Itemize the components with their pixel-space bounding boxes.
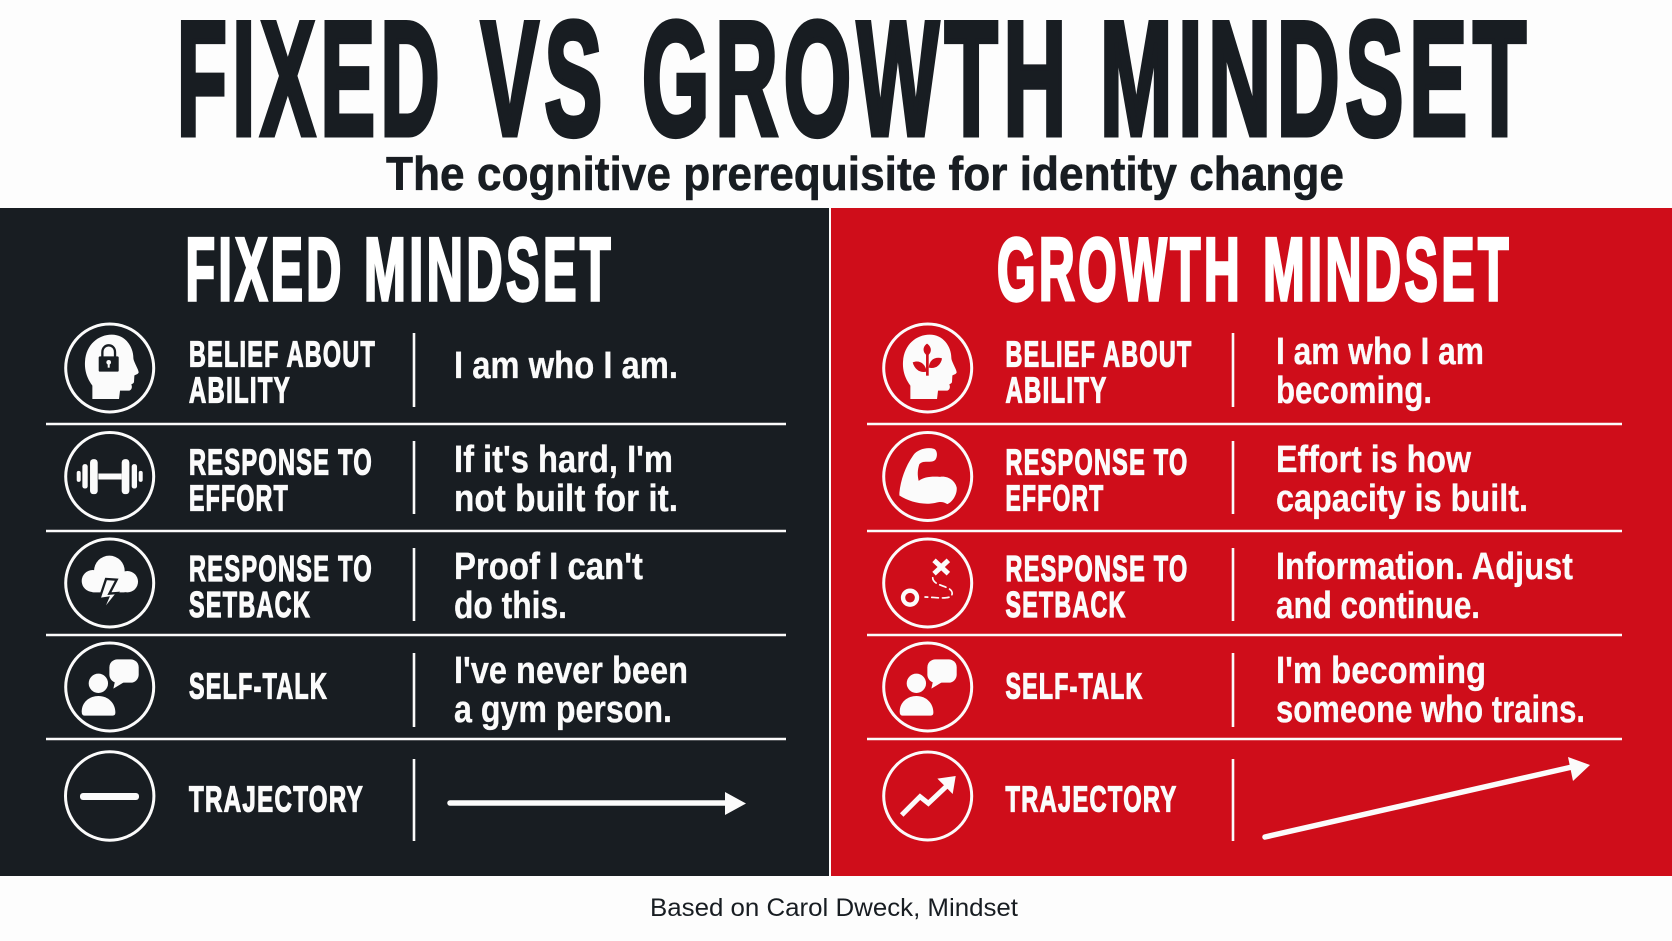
subtitle: The cognitive prerequisite for identity change (386, 147, 1344, 200)
statement: do this. (454, 585, 567, 627)
label: TRAJECTORY (189, 778, 364, 820)
label: EFFORT (189, 478, 289, 518)
icon: person with speech bubble (884, 643, 972, 731)
label: RESPONSE TO (1006, 442, 1188, 482)
icon: dumbbell (66, 433, 154, 520)
icon: rising arrow (884, 752, 972, 840)
label: RESPONSE TO (189, 442, 373, 482)
label (189, 442, 373, 518)
icon: head with plant (884, 324, 972, 412)
statement (1276, 650, 1585, 731)
label: RESPONSE TO (1006, 548, 1188, 589)
icon: flat line (66, 752, 154, 840)
statement: I am who I am (1276, 331, 1484, 373)
statement: Information. Adjust (1276, 546, 1573, 588)
row: response to setback (growth) (884, 539, 1573, 627)
label: RESPONSE TO (189, 548, 373, 589)
statement (454, 650, 688, 731)
footer source note: Based on Carol Dweck, Mindset (650, 894, 1018, 922)
row: self-talk (fixed) (66, 643, 688, 731)
label (189, 548, 373, 625)
label: EFFORT (1006, 478, 1104, 518)
statement (454, 546, 643, 627)
heading: growth mindset: GROWTH (997, 219, 1243, 319)
arrow: rising trajectory (1265, 757, 1590, 837)
label: BELIEF ABOUT (1006, 334, 1192, 374)
statement: I'm becoming (1276, 650, 1486, 692)
icon: flexed bicep (884, 433, 972, 520)
statement: Effort is how (1276, 439, 1471, 481)
label (1006, 548, 1188, 625)
statement: someone who trains. (1276, 689, 1585, 731)
label: TRAJECTORY (1006, 778, 1178, 820)
statement: not built for it. (454, 478, 678, 520)
panel: growth mindset (831, 208, 1672, 876)
row: response to effort (fixed) (66, 433, 678, 520)
label: ABILITY (189, 370, 291, 410)
label (1006, 442, 1188, 518)
row: belief about ability (growth) (884, 324, 1484, 412)
statement (1276, 439, 1528, 520)
row: belief about ability (fixed) (66, 324, 678, 412)
statement: a gym person. (454, 689, 672, 731)
heading: fixed mindset: FIXED (186, 219, 344, 319)
row: trajectory (growth) (884, 752, 1590, 840)
label: SELF-TALK (189, 666, 328, 706)
row: trajectory (fixed) (66, 752, 746, 840)
icon: route with X (884, 539, 972, 627)
label: ABILITY (1006, 370, 1108, 410)
row: response to setback (fixed) (66, 539, 643, 627)
icon: storm cloud with lightning (66, 539, 154, 627)
icon: head with padlock (66, 324, 154, 412)
statement (454, 439, 678, 520)
label: SETBACK (1006, 584, 1126, 625)
statement: I am who I am. (454, 345, 678, 387)
label: BELIEF ABOUT (189, 334, 376, 374)
icon: person with speech bubble (66, 643, 154, 731)
label: SETBACK (189, 584, 311, 625)
label: SELF-TALK (1006, 666, 1144, 706)
arrow: flat trajectory (450, 792, 746, 815)
heading: fixed mindset: MINDSET (364, 219, 614, 319)
statement: Proof I can't (454, 546, 643, 588)
statement: and continue. (1276, 585, 1480, 627)
statement: I've never been (454, 650, 688, 692)
panel: fixed mindset (0, 208, 829, 876)
heading: fixed mindset (186, 219, 614, 319)
statement: If it's hard, I'm (454, 439, 673, 481)
statement: capacity is built. (1276, 478, 1528, 520)
row: response to effort (growth) (884, 433, 1528, 520)
statement (1276, 331, 1484, 412)
title (177, 0, 1532, 170)
label (189, 334, 376, 410)
statement: becoming. (1276, 370, 1432, 412)
statement (1276, 546, 1573, 627)
row: self-talk (growth) (884, 643, 1585, 731)
label (1006, 334, 1192, 410)
